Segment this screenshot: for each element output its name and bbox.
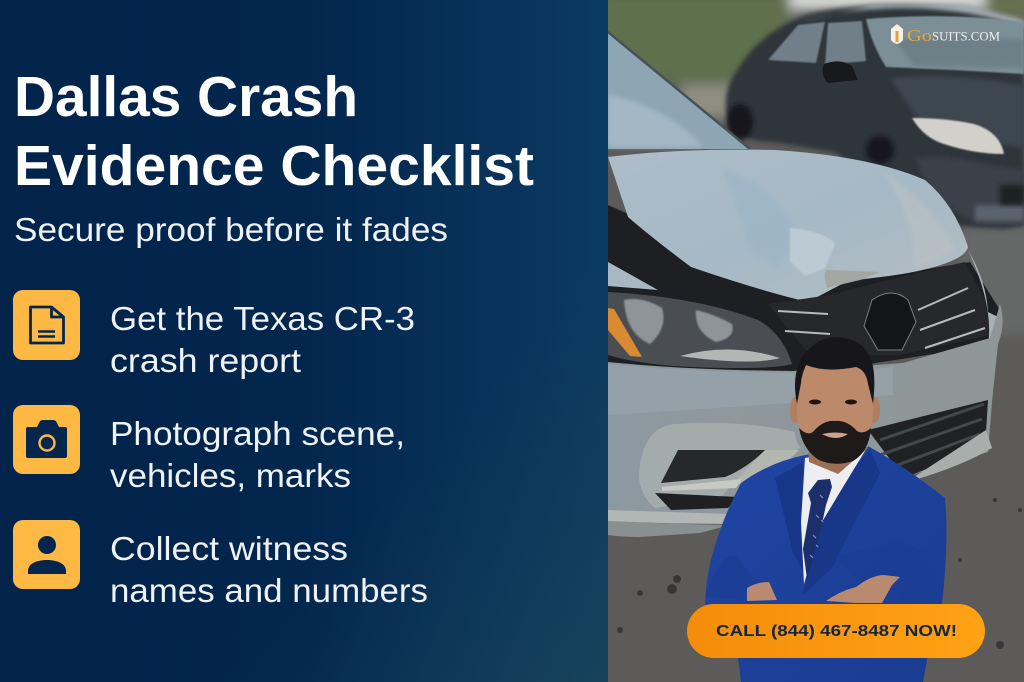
grille — [768, 250, 1000, 355]
headlight — [912, 118, 1004, 154]
photo: damaged cars — [596, 0, 1024, 682]
side windows — [768, 21, 866, 65]
item text: vehicles, marks — [110, 457, 351, 494]
panel: navy checklist background — [0, 0, 608, 682]
headlight — [608, 262, 792, 368]
car hood — [890, 76, 1024, 148]
roof — [800, 4, 1024, 30]
beard — [799, 421, 871, 464]
bumper — [608, 304, 1003, 537]
item text: Photograph scene, — [110, 415, 405, 452]
item text: Collect witness — [110, 530, 348, 567]
eyes — [809, 400, 857, 404]
title: Evidence Checklist — [14, 134, 534, 198]
shirt — [801, 446, 868, 584]
call to action button: CALL (844) 467-8487 NOW! — [716, 623, 957, 640]
attorney portrait — [705, 337, 946, 682]
icon: camera — [13, 405, 80, 474]
title: Dallas Crash — [14, 65, 358, 129]
front car windshield — [608, 32, 750, 149]
logo: GoSuits.com: Go — [907, 26, 932, 45]
subtitle: Secure proof before it fades — [14, 211, 448, 248]
icon: person — [13, 520, 80, 589]
item text: crash report — [110, 342, 301, 379]
blurred trees, sky and far road — [596, 0, 1024, 335]
title — [14, 65, 534, 198]
road background — [608, 0, 1024, 682]
lower grille — [868, 400, 988, 478]
item text — [110, 300, 415, 379]
checklist item: photographs — [13, 405, 405, 494]
logo: GoSuits.com — [891, 24, 1000, 45]
neck — [808, 440, 868, 474]
suit jacket — [705, 446, 946, 682]
checklist item: witnesses — [13, 520, 428, 609]
lapel shading — [775, 449, 880, 596]
necktie — [803, 479, 832, 579]
item text: Get the Texas CR-3 — [110, 300, 415, 337]
car body — [726, 5, 1024, 229]
ears — [790, 397, 880, 423]
front car dark engine bay — [608, 205, 1000, 375]
face — [797, 355, 873, 463]
call to action button — [687, 604, 985, 658]
logo: GoSuits.com: SUITS.COM — [932, 28, 1000, 44]
crossed hands — [747, 575, 900, 603]
fog lamp surround — [639, 423, 801, 508]
sleeve shading — [705, 542, 942, 604]
item text: names and numbers — [110, 572, 428, 609]
asphalt debris — [617, 498, 1022, 649]
lower lip — [608, 510, 728, 524]
wing mirror — [823, 61, 858, 83]
hair — [795, 337, 874, 404]
front bumper — [915, 157, 1024, 225]
windshield — [866, 16, 1024, 74]
rear dark car — [726, 4, 1024, 229]
checklist item: crash report — [13, 290, 415, 379]
item text — [110, 415, 405, 494]
item text — [110, 530, 428, 609]
icon: document — [13, 290, 80, 360]
dented hood — [608, 150, 968, 302]
